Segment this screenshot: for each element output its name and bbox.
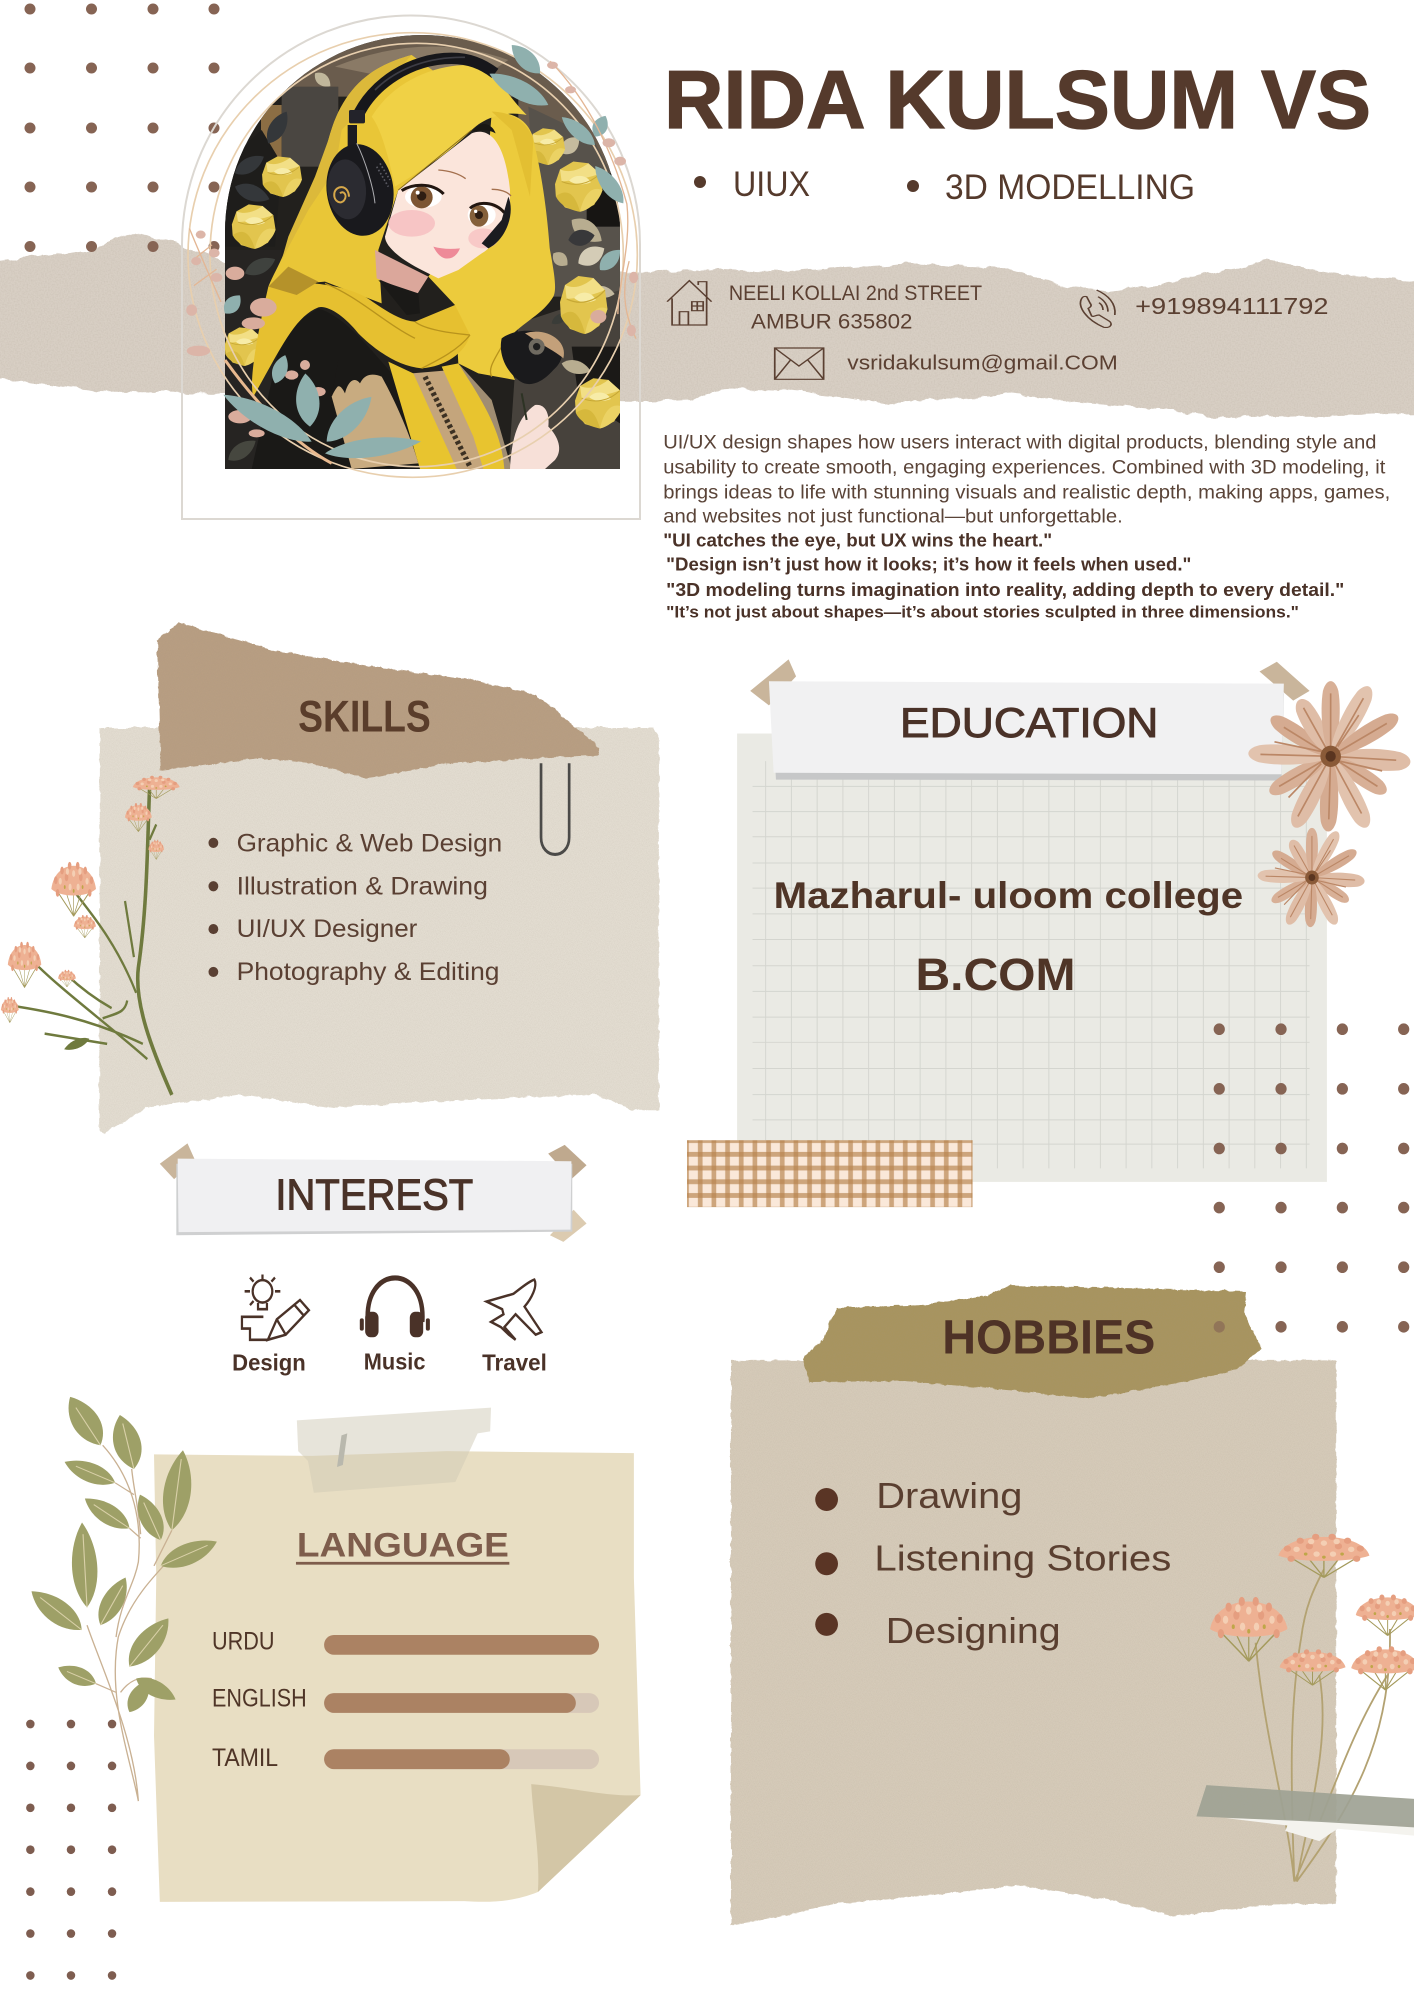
hobbies list: Designing (886, 1611, 1061, 1651)
dots: right (1214, 1023, 1409, 1333)
skills list: Graphic & Web Design (237, 829, 502, 857)
scarf (252, 283, 470, 397)
hobbies (731, 1286, 1414, 1925)
hobbies list (815, 1476, 1171, 1651)
blush (388, 210, 435, 237)
email: vsridakulsum@gmail.COM (847, 352, 1118, 374)
yellow roses (225, 128, 622, 428)
english: ENGLISH (212, 1684, 307, 1712)
flower small (1257, 828, 1365, 927)
role: 3D modelling: 3D MODELLING (945, 168, 1195, 207)
quotes (663, 530, 1344, 622)
heading: skills: SKILLS (298, 691, 431, 741)
role: UIUX: UIUX (733, 165, 810, 204)
interest labels (232, 1348, 547, 1376)
dried flower branch (1, 776, 180, 1095)
language rows (212, 1627, 599, 1772)
mouth (433, 247, 460, 259)
grey torn tape (1196, 1785, 1414, 1841)
address: AMBUR 635802 (751, 310, 912, 333)
plaid tape (687, 1140, 973, 1207)
flower large (1248, 681, 1411, 832)
wreath lines (188, 33, 637, 477)
panel: hobbies paper (731, 1360, 1336, 1925)
panel: skills paper (99, 728, 659, 1133)
neck (375, 250, 428, 295)
icon: phone (1081, 290, 1115, 327)
skills torn heading (157, 623, 600, 779)
skills list: Illustration & Drawing (237, 872, 488, 900)
education (687, 659, 1411, 1207)
contact and summary (663, 281, 1390, 622)
icon: plane (487, 1280, 541, 1340)
summary paragraph (663, 432, 1390, 527)
heading: hobbies: HOBBIES (942, 1311, 1155, 1365)
hand and black rose (501, 331, 564, 469)
face (385, 132, 510, 278)
interest labels: Music (364, 1348, 425, 1375)
phone number: +919894111792 (1135, 293, 1329, 320)
interest labels: Travel (482, 1349, 547, 1376)
address (729, 281, 982, 333)
heading: language: LANGUAGE (297, 1526, 509, 1564)
dried flower bouquet (1210, 1534, 1414, 1882)
tamil: TAMIL (212, 1743, 278, 1772)
icon: house (667, 281, 712, 325)
quotes: "UI catches the eye, but UX wins the heart." (663, 530, 1052, 551)
torn contact strip (0, 232, 1414, 418)
dress (252, 308, 394, 469)
background leaves (224, 69, 616, 466)
hobbies list: Listening Stories (874, 1539, 1171, 1579)
panel: sticky note (154, 1451, 641, 1902)
icon: design (242, 1274, 309, 1340)
portrait illustration (188, 33, 637, 477)
heading: education: EDUCATION (900, 699, 1158, 746)
headphones (321, 57, 511, 248)
teal leaves (218, 39, 630, 463)
hijab hood (268, 55, 492, 303)
leaf branch (23, 1391, 222, 1801)
college name: Mazharul- uloom college (774, 874, 1243, 916)
icon: headphones (360, 1278, 430, 1337)
portrait arch frame (182, 16, 640, 519)
left eye (402, 170, 466, 208)
title: RIDA KULSUM VS (664, 53, 1371, 146)
hobbies torn heading (802, 1286, 1261, 1398)
address: NEELI KOLLAI 2nd STREET (729, 281, 982, 305)
icon: envelope (775, 348, 824, 379)
interest banner (160, 1143, 587, 1242)
skills and interest (1, 623, 659, 1376)
skills list: UI/UX Designer (237, 915, 418, 943)
urdu: URDU (212, 1627, 275, 1655)
panel: grid paper (737, 734, 1327, 1182)
dots: top left (24, 4, 220, 252)
dots: bottom left (26, 1720, 116, 1980)
urdu (212, 1627, 599, 1655)
education banner (750, 659, 1310, 781)
note tape (297, 1408, 491, 1493)
interest labels: Design (232, 1349, 306, 1376)
role: UIUX (694, 165, 810, 204)
hobbies list: Drawing (876, 1476, 1022, 1516)
icon: paperclip (541, 763, 569, 854)
twig (225, 360, 332, 463)
language (23, 1391, 641, 1980)
pink twigs outside arch (186, 61, 638, 356)
right eye (468, 189, 511, 227)
degree: B.COM (915, 949, 1076, 1000)
grid lines (753, 761, 1310, 1168)
skills list: Photography & Editing (237, 958, 500, 985)
tamil (212, 1743, 599, 1772)
english (212, 1684, 599, 1713)
inner pink blossoms (226, 267, 606, 437)
skills list (208, 829, 502, 985)
note fold (531, 1784, 641, 1892)
summary paragraph: and websites not just functional—but unforgettable. (663, 506, 1123, 527)
heading: interest: INTEREST (275, 1170, 473, 1219)
